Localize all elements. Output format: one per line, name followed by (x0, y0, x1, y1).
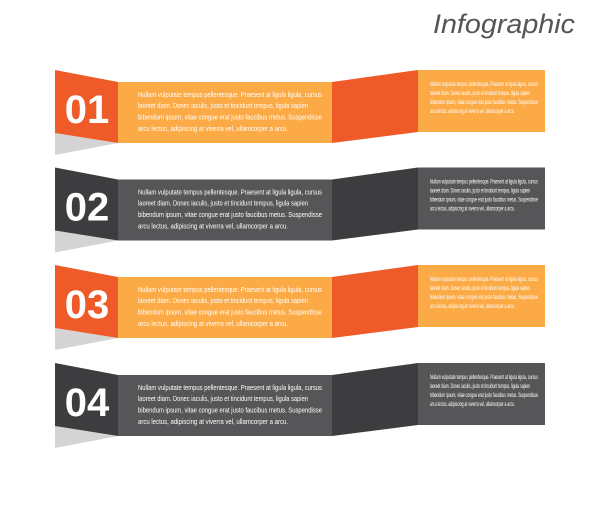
number: 02 (65, 186, 109, 230)
text block: bibendum ipsum, vitae congue erat justo faucibus metus. Suspendisse (138, 308, 322, 316)
text block: arcu lectus, adipiscing at viverra vel, ullamcorper a arcu. (138, 417, 288, 426)
panel: row 03 (55, 265, 545, 350)
panel: row 01 (55, 70, 545, 155)
text block: Nullam vulputate tempus pellentesque. Praesent at ligula ligula, cursus (138, 188, 322, 196)
text block: Nullam vulputate tempus pellentesque. Praesent at ligula ligula, cursus (138, 285, 322, 294)
text block: laoreet diam. Donec iaculis, justo et tincidunt tempus, ligula sapien (138, 101, 308, 110)
text block (138, 90, 322, 133)
text block: Nullam vulputate tempus pellentesque. Praesent at ligula ligula, cursus (138, 90, 322, 99)
title: Infographic (433, 9, 576, 39)
text block (138, 383, 322, 426)
text block: laoreet diam. Donec iaculis, justo et tincidunt tempus, ligula sapien (138, 394, 308, 403)
shadow (55, 133, 118, 155)
text block: arcu lectus, adipiscing at viverra vel, ullamcorper a arcu. (138, 124, 288, 133)
panel: row 04 (55, 363, 545, 448)
right text (430, 375, 538, 408)
number tab (55, 70, 118, 143)
panel: row 02 (55, 168, 545, 252)
number: 04 (65, 381, 110, 425)
right text: arcu lectus, adipiscing at viverra vel, ullamcorper a arcu. (430, 304, 515, 310)
text block: laoreet diam. Donec iaculis, justo et tincidunt tempus, ligula sapien (138, 296, 308, 305)
text block (138, 188, 322, 230)
right text: arcu lectus, adipiscing at viverra vel, ullamcorper a arcu. (430, 109, 515, 115)
right text (430, 82, 538, 115)
text block: laoreet diam. Donec iaculis, justo et tincidunt tempus, ligula sapien (138, 198, 308, 208)
right text: arcu lectus, adipiscing at viverra vel, ullamcorper a arcu. (430, 402, 515, 408)
right text: arcu lectus, adipiscing at viverra vel, ullamcorper a arcu. (430, 206, 515, 212)
text block: arcu lectus, adipiscing at viverra vel, ullamcorper a arcu. (138, 222, 288, 230)
text block: bibendum ipsum, vitae congue erat justo faucibus metus. Suspendisse (138, 112, 322, 122)
text block (138, 285, 322, 328)
text block: Nullam vulputate tempus pellentesque. Praesent at ligula ligula, cursus (138, 383, 322, 392)
right text (430, 180, 538, 212)
text block: bibendum ipsum, vitae congue erat justo faucibus metus. Suspendisse (138, 210, 322, 219)
number: 01 (65, 88, 109, 132)
middle panel (118, 82, 332, 143)
number: 03 (65, 283, 109, 327)
text block: bibendum ipsum, vitae congue erat justo faucibus metus. Suspendisse (138, 406, 322, 414)
fold (332, 70, 418, 143)
text block: arcu lectus, adipiscing at viverra vel, ullamcorper a arcu. (138, 319, 288, 328)
right panel (418, 70, 545, 132)
right text (430, 277, 538, 310)
